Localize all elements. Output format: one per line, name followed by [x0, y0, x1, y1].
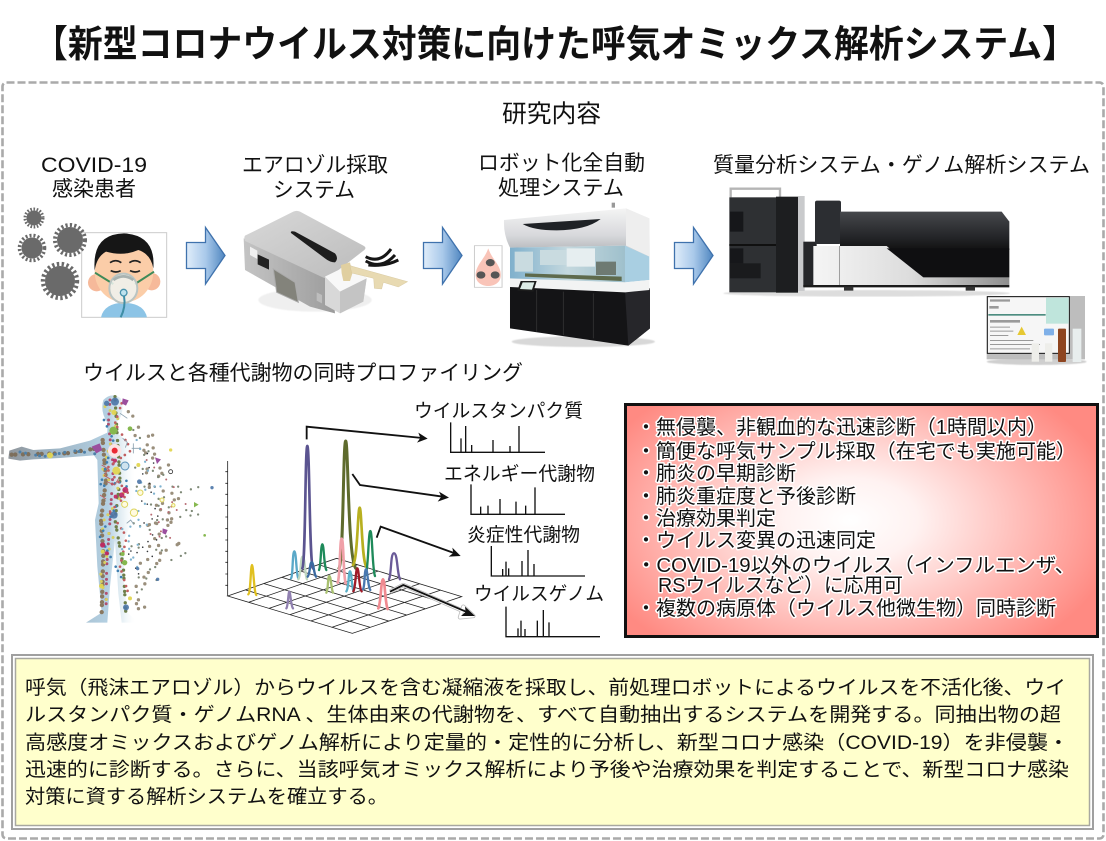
arrow to inflammatory metabolites	[377, 527, 461, 557]
label: aerosol: エアロゾル採取	[242, 154, 388, 177]
label: patient: 感染患者	[52, 178, 136, 201]
list text: ・複数の病原体（ウイルス他微生物）同時診断	[636, 597, 1056, 620]
image: robot	[504, 203, 655, 347]
arrow to energy metabolites	[352, 474, 449, 502]
label: robot: ロボット化全自動	[478, 152, 645, 175]
summary paragraph: 呼気（飛沫エアロゾル）からウイルスを含む凝縮液を採取し、前処理ロボットによるウイルスを不活化後、ウイ	[25, 677, 1066, 699]
icon: sample droplet	[474, 246, 502, 287]
spectrum: virus protein	[451, 422, 545, 452]
spectrum: inflammatory metabolites	[491, 546, 585, 576]
icon: patient with oxygen mask	[82, 233, 167, 317]
spectrum: virus genome	[506, 607, 600, 637]
arrow to virus protein	[307, 427, 428, 443]
arrow 3	[674, 228, 713, 284]
arrow to virus genome	[390, 585, 475, 617]
label: inflammatory metabolites: 炎症性代謝物	[467, 524, 580, 546]
list text: ・簡便な呼気サンプル採取（在宅でも実施可能）	[636, 440, 1076, 463]
molecule dots inside the body	[12, 397, 132, 617]
image: human body dissolving into molecules	[8, 395, 214, 623]
summary paragraph: 迅速的に診断する。さらに、当該呼気オミックス解析により予後や治療効果を判定することで、新型コロナ感染	[25, 759, 1069, 781]
summary paragraph: 高感度オミックスおよびゲノム解析により定量的・定性的に分析し、新型コロナ感染（COVID-19）を非侵襲・	[25, 732, 1069, 754]
spectrum: energy metabolites	[471, 484, 565, 514]
label: patient: COVID-19	[41, 154, 147, 177]
label: robot	[478, 152, 645, 200]
label: aerosol: システム	[273, 179, 355, 202]
list text: ・ウイルス変異の迅速同定	[636, 529, 876, 552]
label: aerosol	[242, 154, 388, 202]
label: virus genome: ウイルスゲノム	[474, 583, 604, 605]
label: patient	[41, 154, 147, 201]
image: genome assay kit	[987, 296, 1087, 365]
list text: ・肺炎の早期診断	[636, 462, 796, 485]
icon: viruses	[20, 209, 85, 298]
grid floor	[228, 558, 462, 633]
image: aerosol device	[244, 211, 408, 313]
heading: simultaneous profiling: ウイルスと各種代謝物の同時プロファイリング	[83, 362, 523, 385]
list text: ・無侵襲、非観血的な迅速診断（1時間以内）	[636, 416, 1047, 439]
label: energy metabolites: エネルギー代謝物	[444, 463, 595, 485]
label: virus protein: ウイルスタンパク質	[414, 400, 583, 422]
summary paragraph: 対策に資する解析システムを確立する。	[25, 786, 388, 808]
image: mass spectrometer	[723, 189, 1010, 297]
panel: benefits list	[626, 404, 1098, 636]
summary paragraph: ルスタンパク質・ゲノムRNA 、生体由来の代謝物を、すべて自動抽出するシステムを開発する。同抽出物の超	[25, 704, 1061, 726]
list text: ・肺炎重症度と予後診断	[636, 485, 856, 508]
arrow 1	[186, 228, 225, 284]
list text: ・COVID-19以外のウイルス（インフルエンザ、	[636, 554, 1075, 577]
panel: summary text	[12, 655, 1093, 829]
list text: RSウイルスなど）に応用可	[658, 574, 903, 597]
list text: ・治療効果判定	[636, 507, 776, 530]
peaks	[248, 441, 400, 609]
step: aerosol sampling system	[242, 154, 408, 313]
label: robot: 処理システム	[498, 177, 624, 200]
step: COVID-19 patient	[20, 154, 167, 317]
list text	[636, 416, 1076, 620]
y axis	[225, 461, 228, 596]
arrow 2	[424, 228, 462, 284]
step: robot automated processing system	[474, 152, 655, 347]
step: mass spectrometry and genome analysis	[713, 154, 1090, 365]
summary paragraph	[25, 677, 1069, 808]
chart: 3D chromatogram with peaks	[225, 422, 600, 637]
molecule dots scattering to the right	[120, 412, 207, 610]
label: mass spec: 質量分析システム・ゲノム解析システム	[713, 154, 1090, 177]
heading: research content: 研究内容	[502, 100, 601, 128]
